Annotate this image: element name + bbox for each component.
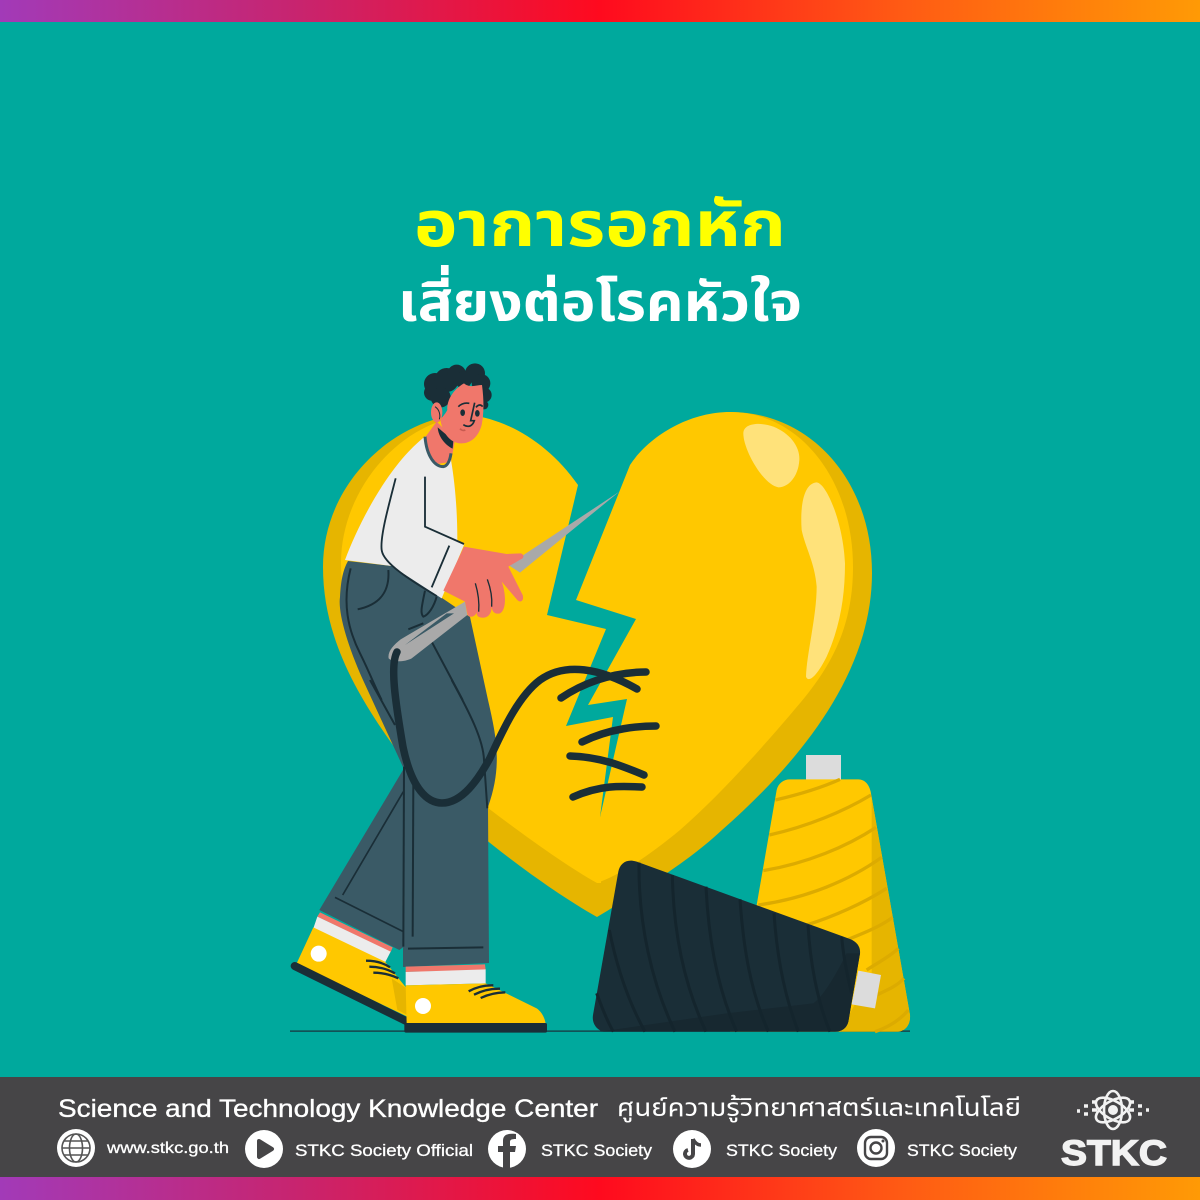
facebook label: STKC Society (541, 1141, 653, 1160)
finger lines (475, 579, 492, 612)
title line 2: เสี่ยงต่อโรคหัวใจ (398, 265, 802, 333)
organisation name english: Science and Technology Knowledge Center (58, 1095, 598, 1123)
thread and stitches (394, 652, 656, 803)
ear (431, 402, 442, 422)
trousers (340, 561, 497, 967)
neck (426, 422, 455, 465)
front foot (404, 964, 547, 1033)
illustration: man stitching a broken heart (290, 363, 910, 1033)
hand (443, 547, 523, 618)
broken heart (323, 412, 872, 917)
chin shadow (438, 427, 453, 449)
instagram icon (857, 1129, 895, 1167)
title (398, 190, 802, 333)
trouser details (346, 568, 463, 700)
tiktok label: STKC Society (726, 1141, 838, 1160)
heart highlights (743, 424, 845, 679)
facebook icon (488, 1130, 526, 1168)
facial features (458, 403, 483, 430)
dark thread spool (593, 861, 881, 1032)
hair (424, 363, 492, 409)
logo: STKC (1061, 1091, 1167, 1173)
title line 1: อาการอกหัก (414, 190, 786, 260)
website icon (57, 1129, 95, 1167)
ground line (290, 1030, 910, 1032)
shirt (345, 436, 464, 598)
youtube label: STKC Society Official (295, 1141, 473, 1160)
bottom gradient bar (0, 1177, 1200, 1200)
upper body (345, 363, 492, 598)
back leg and trousers (295, 767, 420, 1021)
logo atom mark (1077, 1091, 1149, 1129)
youtube icon (245, 1130, 283, 1168)
yellow thread spool (730, 755, 910, 1032)
logo: STKC: STKC (1061, 1134, 1167, 1173)
tiktok icon (673, 1130, 711, 1168)
instagram label: STKC Society (907, 1141, 1018, 1160)
website address: www.stkc.go.th (106, 1140, 229, 1157)
footer band (0, 1077, 1200, 1200)
face (441, 383, 483, 443)
organisation name thai: ศูนย์ความรู้วิทยาศาสตร์และเทคโนโลยี (617, 1094, 1021, 1123)
needle (388, 492, 619, 661)
top gradient bar (0, 0, 1200, 22)
